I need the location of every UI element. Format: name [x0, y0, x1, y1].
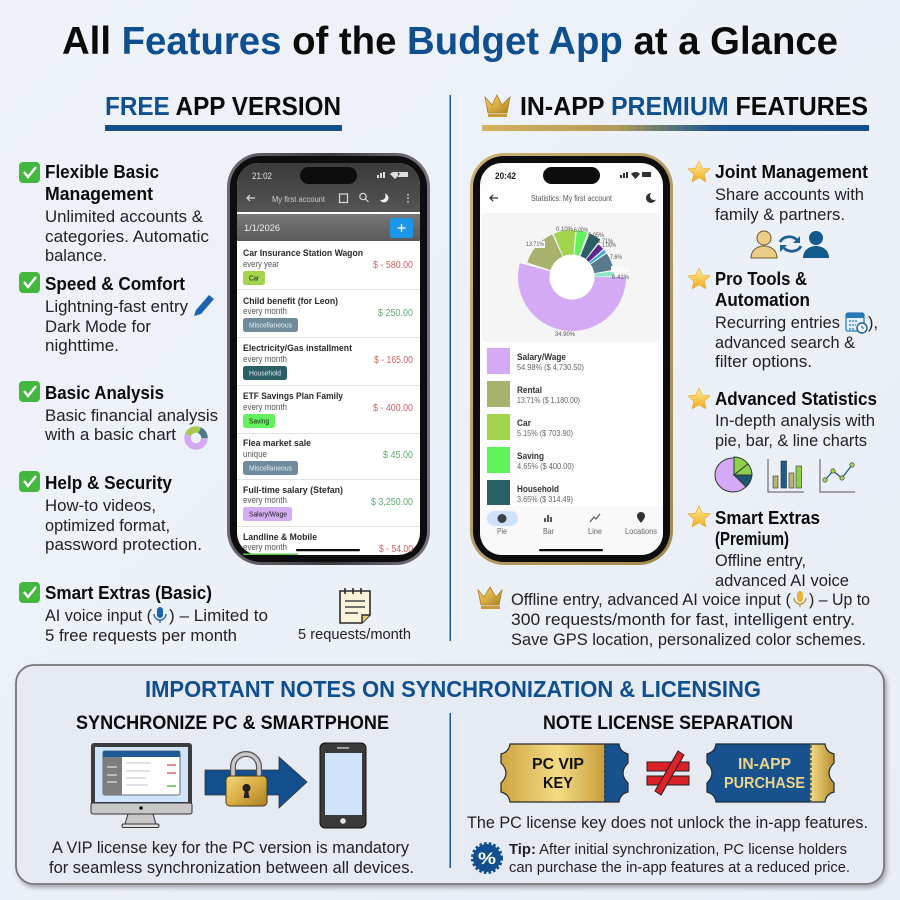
legend: Rental	[517, 385, 542, 396]
feature: pro tools and automation: Automation	[715, 289, 810, 310]
icon: in-app purchase ticket: IN-APP	[738, 756, 791, 773]
icon: in-app purchase ticket: PURCHASE	[724, 775, 805, 792]
feature: pro tools and automation: filter options.	[715, 353, 812, 371]
icon: percent badge: %	[478, 849, 496, 868]
callout: premium smart extras details: Offline entry, advanced AI voice input (	[511, 591, 792, 609]
transaction: landline: $ - 54.00	[379, 544, 413, 555]
feature: joint management	[688, 161, 868, 258]
tip with discount badge	[473, 841, 850, 876]
feature: help and security	[19, 471, 202, 554]
icon: pc vip key ticket: PC VIP	[532, 756, 584, 773]
transaction: etf savings	[237, 391, 420, 434]
transaction: salary: Salary/Wage	[249, 510, 287, 518]
chart labels: 1.00%	[602, 243, 617, 249]
feature: flexible basic management: Management	[45, 183, 153, 204]
sub-panel: synchronize: for seamless synchronization between all devices.	[49, 859, 414, 877]
tip with discount badge: can purchase the in-app features at a reduced price.	[509, 859, 850, 876]
feature: joint management: family & partners.	[715, 206, 845, 224]
legend: 54.98% ($ 4,730.50)	[517, 362, 584, 372]
divider	[450, 95, 451, 641]
legend: 13.71% ($ 1,180.00)	[517, 395, 580, 405]
feature: smart extras basic: 5 requests/month	[298, 627, 411, 643]
heading: premium features	[482, 93, 869, 131]
feature: smart extras basic	[19, 582, 411, 645]
transaction: etf savings: every month	[243, 402, 287, 412]
legend: Household	[517, 484, 559, 495]
sub-panel: synchronize	[49, 713, 414, 877]
chart labels: 13.71%	[526, 242, 545, 248]
transaction: landline	[243, 532, 413, 555]
transaction: flea market: Flea market sale	[243, 438, 311, 449]
transaction: landline: every month	[243, 542, 287, 552]
feature: advanced statistics: Advanced Statistics	[715, 388, 877, 409]
transaction: car insurance: Car Insurance Station Wagon	[243, 248, 363, 259]
feature: flexible basic management: Flexible Basic	[45, 161, 159, 182]
chart labels: 3.71%	[597, 239, 614, 245]
bottom navigation: Locations	[625, 527, 657, 536]
heading: premium features: IN-APP PREMIUM FEATURES	[520, 93, 868, 121]
transaction: child benefit: $ 250.00	[378, 308, 413, 319]
feature: smart extras basic: Smart Extras (Basic)	[45, 582, 212, 603]
transaction: flea market	[237, 438, 420, 480]
legend: Saving	[517, 451, 544, 462]
feature: pro tools and automation: ),	[868, 314, 878, 332]
sub-panel: license separation: The PC license key does not unlock the in-app features.	[467, 814, 868, 832]
chart labels: 34.90%	[555, 332, 576, 338]
legend	[487, 348, 584, 505]
feature: basic analysis: with a basic chart	[44, 426, 176, 444]
panel: important notes	[16, 665, 884, 884]
feature: help and security: How-to videos,	[45, 497, 156, 515]
feature: pro tools and automation: advanced search &	[715, 334, 855, 352]
feature: basic analysis: Basic Analysis	[45, 382, 164, 403]
legend: Salary/Wage	[517, 352, 566, 363]
transaction: electricity	[237, 343, 420, 386]
icon: percent badge	[473, 844, 501, 872]
icon: desktop monitor	[91, 743, 192, 828]
transaction: car insurance: every year	[243, 259, 279, 269]
feature: advanced statistics: In-depth analysis with	[715, 412, 875, 430]
feature: pro tools and automation: Recurring entries	[715, 314, 840, 332]
feature: smart extras premium: advanced AI voice	[715, 572, 849, 590]
sub-panel: synchronize: SYNCHRONIZE PC & SMARTPHONE	[76, 713, 389, 734]
transaction: electricity: Household	[249, 368, 281, 378]
chart labels: 6.00%	[574, 228, 589, 234]
panel heading: IMPORTANT NOTES ON SYNCHRONIZATION & LICENSING	[145, 676, 761, 702]
transaction: flea market: $ 45.00	[383, 450, 413, 461]
chart labels: 7.6%	[610, 255, 623, 261]
icon: notepad	[340, 588, 370, 623]
feature: joint management: Joint Management	[715, 161, 868, 182]
bottom navigation: Bar	[543, 527, 554, 536]
bottom navigation: Pie	[497, 527, 507, 536]
feature: speed and comfort: Lightning-fast entry	[45, 298, 189, 316]
feature: advanced statistics: pie, bar, & line charts	[715, 432, 867, 450]
feature: smart extras basic: ) – Limited to	[169, 607, 268, 625]
transaction: electricity: $ - 165.00	[374, 355, 413, 366]
chart labels: 6.41%	[612, 275, 630, 281]
chart: donut of categories	[534, 239, 610, 315]
icon: padlock	[226, 754, 267, 806]
feature: basic analysis: Basic financial analysis	[45, 407, 218, 425]
icon: pie chart	[715, 457, 752, 492]
feature: speed and comfort: nighttime.	[45, 337, 119, 355]
icon: crown	[485, 95, 510, 117]
feature: basic analysis	[19, 381, 218, 446]
feature: flexible basic management: Unlimited accounts &	[45, 208, 203, 226]
icon: pc vip key ticket: KEY	[543, 775, 573, 792]
transaction: salary	[237, 485, 420, 527]
phone: premium statistics screenshot	[470, 153, 673, 565]
icon: smartphone	[320, 743, 366, 828]
icon: in-app purchase ticket	[707, 744, 834, 802]
feature: smart extras basic: 5 free requests per month	[45, 627, 237, 645]
icon: microphone	[154, 607, 166, 623]
chart labels: 5.05%	[588, 233, 605, 239]
icon: people syncing	[751, 231, 829, 258]
transaction: etf savings: $ - 400.00	[373, 403, 413, 414]
feature: flexible basic management: categories. Automatic	[45, 228, 209, 246]
sub-panel: synchronize: A VIP license key for the PC version is mandatory	[52, 839, 410, 857]
feature: smart extras premium	[688, 506, 849, 590]
legend: 4.65% ($ 400.00)	[517, 461, 574, 471]
phone: free app screenshot: 21:02	[252, 171, 272, 182]
phone: premium statistics screenshot: 20:42	[495, 171, 516, 182]
bottom navigation	[480, 506, 663, 555]
transaction: flea market: Miscellaneous	[249, 464, 292, 472]
feature: speed and comfort: Speed & Comfort	[45, 273, 185, 294]
callout: premium smart extras details	[478, 587, 870, 649]
transaction: child benefit: Miscellaneous	[249, 320, 292, 330]
feature: smart extras premium: (Premium)	[715, 528, 789, 549]
feature: speed and comfort	[19, 272, 214, 355]
heading: free app version: FREE APP VERSION	[105, 93, 341, 121]
panel: free app version	[19, 93, 411, 645]
feature: flexible basic management: balance.	[45, 247, 107, 265]
phone: free app screenshot	[227, 153, 430, 565]
feature: help and security: password protection.	[45, 536, 202, 554]
icon: crown	[478, 587, 502, 609]
icon: bar chart	[768, 459, 804, 492]
callout: premium smart extras details: 300 requests/month for fast, intelligent entry.	[511, 611, 855, 629]
icon: line chart	[820, 459, 855, 492]
bottom navigation: Line	[588, 527, 603, 536]
phone: free app screenshot: 1/1/2026	[244, 223, 280, 234]
icon: small donut chart	[188, 430, 204, 446]
transaction: child benefit: Child benefit (for Leon)	[243, 296, 338, 307]
sub-panel: license separation	[467, 713, 868, 876]
transaction: etf savings: Saving	[249, 416, 269, 426]
transaction: etf savings: ETF Savings Plan Family	[243, 391, 344, 402]
feature: help and security: Help & Security	[45, 472, 173, 493]
callout: premium smart extras details: ) – Up to	[809, 591, 870, 609]
feature: pro tools and automation: Pro Tools &	[715, 268, 807, 289]
feature: smart extras premium: Smart Extras	[715, 507, 820, 528]
legend: 5.15% ($ 703.90)	[517, 428, 573, 438]
legend: 3.65% ($ 314.49)	[517, 494, 573, 504]
transaction: child benefit	[237, 296, 420, 338]
phone: premium statistics screenshot: Statistics: My first account	[531, 193, 613, 203]
legend: Car	[517, 418, 531, 429]
transaction: salary: $ 3,250.00	[371, 497, 413, 508]
icon: calendar clock	[846, 313, 867, 333]
feature: joint management: Share accounts with	[715, 186, 864, 204]
transaction: car insurance: Car	[249, 274, 259, 282]
arrow: pc to phone	[205, 757, 307, 808]
feature: smart extras premium: Offline entry,	[715, 552, 806, 570]
feature: pro tools and automation	[688, 268, 878, 371]
feature: help and security: optimized format,	[45, 517, 170, 535]
icon: not equal sign	[647, 751, 689, 795]
transaction: salary: Full-time salary (Stefan)	[243, 485, 343, 496]
transaction: electricity: Electricity/Gas installment	[243, 343, 353, 354]
transaction: electricity: every month	[243, 354, 287, 364]
icon: pc vip key ticket	[501, 744, 628, 802]
icon: microphone gold	[794, 591, 806, 607]
feature: advanced statistics	[688, 388, 877, 492]
title: All Features of the Budget App at a Glance	[62, 20, 838, 63]
chart labels: 0.10%	[556, 227, 574, 233]
chart labels	[525, 227, 630, 338]
transaction: car insurance	[237, 248, 420, 290]
tip with discount badge: Tip: After initial synchronization, PC license holders	[509, 841, 847, 858]
transaction: landline: Landline & Mobile	[243, 532, 317, 543]
feature: speed and comfort: Dark Mode for	[45, 318, 152, 336]
transaction: child benefit: every month	[243, 306, 287, 316]
feature: smart extras basic: AI voice input (	[45, 607, 152, 625]
phone: free app screenshot: My first account	[272, 194, 326, 204]
callout: premium smart extras details: Save GPS location, personalized color schemes.	[511, 631, 866, 649]
feature: flexible basic management	[19, 161, 209, 265]
transaction: car insurance: $ - 580.00	[373, 260, 413, 271]
transaction: salary: every month	[243, 495, 287, 505]
transaction: flea market: unique	[243, 449, 267, 459]
sub-panel: license separation: NOTE LICENSE SEPARATION	[543, 713, 793, 734]
